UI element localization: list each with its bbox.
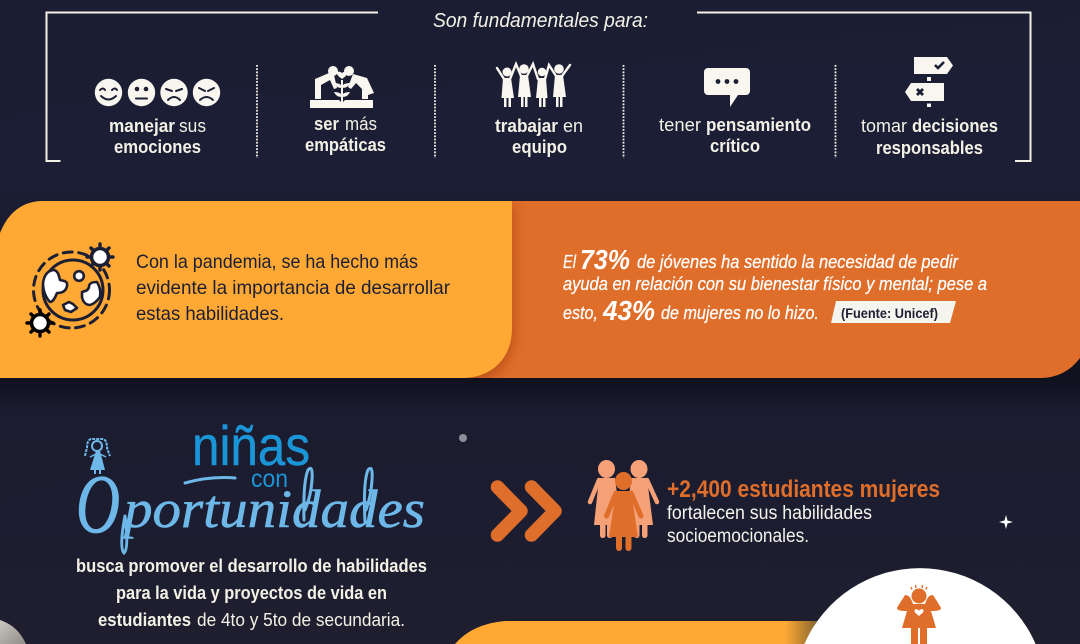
- wordmark: Oportunidades: portunidades: [120, 479, 425, 539]
- text: descripción del programa: [76, 556, 427, 630]
- text: pandemia: estas habilidades.: [136, 303, 284, 325]
- dotted dividers: [257, 65, 836, 158]
- item: ser más empáticas: [305, 66, 386, 155]
- source tag: Fuente Unicef: [831, 301, 956, 323]
- wordmark: Oportunidades: O: [76, 458, 120, 551]
- frame: Son fundamentales para: [46, 12, 1030, 161]
- icon: four women holding hands up: [497, 64, 570, 107]
- label: trabajar en equipo: [495, 116, 583, 157]
- icon: direction signpost: [905, 57, 953, 107]
- label: ser más empáticas: más: [345, 114, 377, 134]
- label: manejar sus emociones: manejar: [109, 116, 175, 136]
- icon: four emotion faces: [95, 79, 220, 106]
- label: trabajar en equipo: en: [563, 116, 583, 136]
- text: estadística de jóvenes: esto,: [563, 303, 598, 323]
- label: tener pensamiento crítico: tener: [659, 115, 701, 135]
- text: estadística de jóvenes: 43%: [602, 295, 655, 326]
- text: descripción del programa: de 4to y 5to de secundaria.: [197, 610, 405, 630]
- decorative dot: [459, 434, 467, 442]
- item: tomar decisiones responsables: [861, 57, 998, 158]
- icon: girl with heart: [897, 585, 941, 644]
- label: trabajar en equipo: trabajar: [495, 116, 558, 136]
- icon: speech bubble: [704, 68, 750, 107]
- label: tener pensamiento crítico: crítico: [710, 136, 760, 156]
- text: 2400 estudiantes mujeres: +2,400 estudiantes mujeres: [667, 476, 940, 503]
- label: tomar decisiones responsables: responsables: [876, 138, 983, 158]
- text: estadística de jóvenes: 73%: [580, 244, 630, 275]
- label: tomar decisiones responsables: decisiones: [912, 116, 998, 136]
- panel: estadística Unicef: [462, 201, 1080, 378]
- text: 2400 estudiantes mujeres: [667, 476, 940, 547]
- panel: pandemia: [0, 201, 512, 378]
- text: pandemia: evidente la importancia de desarrollar: [136, 277, 450, 299]
- text: pandemia: [136, 251, 450, 325]
- label: manejar sus emociones: sus: [179, 116, 206, 136]
- icon: three women: [590, 460, 657, 551]
- label: ser más empáticas: [305, 114, 386, 155]
- icon: globe with viruses: [27, 244, 113, 336]
- label: tener pensamiento crítico: [659, 115, 811, 156]
- label: tomar decisiones responsables: tomar: [861, 116, 907, 136]
- panel: bottom yellow: [455, 621, 830, 644]
- item: trabajar en equipo: [495, 64, 583, 157]
- text: estadística de jóvenes: [563, 244, 987, 326]
- label: ser más empáticas: ser: [314, 114, 339, 134]
- arrow: double chevron: [498, 487, 555, 535]
- text: descripción del programa: para la vida y proyectos de vida en: [116, 583, 387, 603]
- icon: two people and a plant: [310, 66, 374, 108]
- wordmark: niñas: niñas: [192, 414, 310, 477]
- text: descripción del programa: estudiantes: [98, 610, 191, 630]
- text: pandemia: Con la pandemia, se ha hecho más: [136, 251, 418, 273]
- heading: Son fundamentales para: Son fundamentales para:: [433, 10, 648, 32]
- text: estadística de jóvenes: ayuda en relación con su bienestar físico y mental; pese a: [563, 274, 987, 294]
- item: manejar sus emociones: [95, 79, 220, 157]
- logo: Niñas con Oportunidades: [76, 414, 425, 553]
- text: estadística de jóvenes: de mujeres no lo hizo.: [661, 303, 819, 323]
- item: tener pensamiento crítico: [659, 68, 811, 156]
- text: 2400 estudiantes mujeres: socioemocionales.: [667, 526, 809, 547]
- decorative star: [999, 515, 1013, 529]
- text: estadística de jóvenes: El: [563, 252, 577, 272]
- decorative grey circle, bottom left: [0, 620, 26, 644]
- label: tomar decisiones responsables: [861, 116, 998, 158]
- wordmark: Oportunidades: [76, 458, 425, 553]
- source tag: Fuente Unicef: (Fuente: Unicef): [841, 305, 938, 321]
- wordmark: con: con: [251, 465, 288, 493]
- label: manejar sus emociones: [109, 116, 206, 157]
- text: 2400 estudiantes mujeres: fortalecen sus habilidades: [667, 503, 872, 524]
- label: trabajar en equipo: equipo: [512, 137, 567, 157]
- label: manejar sus emociones: emociones: [114, 137, 201, 157]
- panel: white circle: [804, 568, 1036, 644]
- text: descripción del programa: busca promover el desarrollo de habilidades: [76, 556, 427, 576]
- text: estadística de jóvenes: de jóvenes ha sentido la necesidad de pedir: [637, 252, 959, 272]
- label: ser más empáticas: empáticas: [305, 135, 386, 155]
- label: tener pensamiento crítico: pensamiento: [706, 115, 811, 135]
- icon: girl: [85, 439, 110, 474]
